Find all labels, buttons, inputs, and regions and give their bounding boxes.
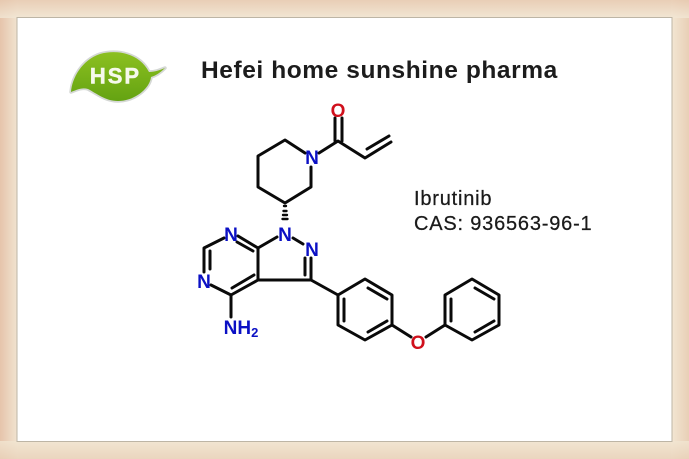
atom labels: N (305, 240, 319, 261)
bonds (204, 118, 499, 340)
atom labels: N (305, 148, 319, 169)
title: Hefei home sunshine pharma (201, 57, 558, 84)
compound name and CAS number: Ibrutinib (414, 188, 492, 210)
stereo hashed wedge (282, 206, 288, 219)
compound name and CAS number: CAS: 936563-96-1 (414, 213, 592, 235)
atom labels: O (411, 333, 425, 354)
logo: HSP green leaf (71, 52, 165, 101)
atom labels: N (278, 225, 292, 246)
compound name and CAS number (414, 188, 592, 235)
atom labels: N (224, 225, 238, 246)
atom labels: N (197, 272, 211, 293)
atom labels: 2 (251, 325, 258, 340)
atom labels: NH (224, 318, 251, 339)
chemical structure of ibrutinib (197, 101, 499, 354)
atom labels: O (331, 101, 345, 122)
atom labels (197, 101, 425, 354)
logo text: HSP (90, 64, 141, 88)
